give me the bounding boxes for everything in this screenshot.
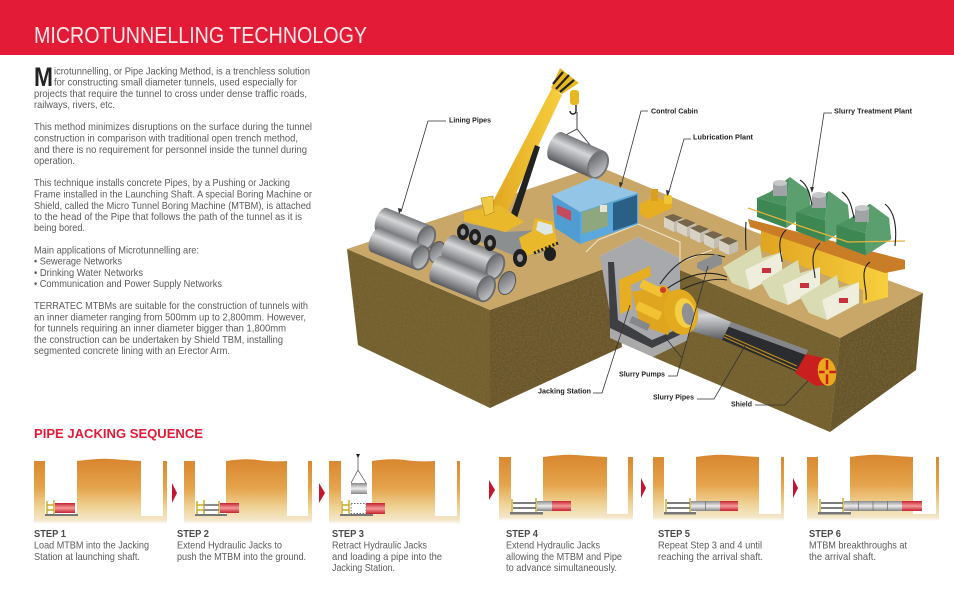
step 6 text: the arrival shaft. xyxy=(809,552,876,563)
step 2 text: Extend Hydraulic Jacks to xyxy=(177,540,282,552)
thrust ring xyxy=(660,286,702,338)
step 6 text: MTBM breakthroughs at xyxy=(809,540,907,552)
crane cab xyxy=(519,218,557,257)
intro text block: and there is no requirement for personnel inside the tunnel during xyxy=(34,145,307,156)
step 4 text: to advance simultaneously. xyxy=(506,563,617,574)
step 1 text: Load MTBM into the Jacking xyxy=(34,540,149,552)
orange platform beam xyxy=(748,219,905,273)
crane boom xyxy=(487,88,562,217)
intro text block: Shield, called the Micro Tunnel Boring Machine (MTBM), is attached xyxy=(34,201,311,212)
ground surface xyxy=(347,166,923,338)
intro text block: • Communication and Power Supply Networks xyxy=(34,279,222,290)
label: slurry pumps: Slurry Pumps xyxy=(619,370,665,378)
main illustration: microtunnelling site cutaway xyxy=(347,68,923,432)
intro text block: TERRATEC MTBMs are suitable for the construction of tunnels with xyxy=(34,301,308,312)
step 4 text: allowing the MTBM and Pipe xyxy=(506,552,622,563)
label: control cabin: Control Cabin xyxy=(651,106,698,116)
step 5 text: STEP 5 xyxy=(658,529,690,540)
label: slurry pipes: Slurry Pipes xyxy=(653,392,694,402)
slurry pump unit xyxy=(697,254,722,272)
arrow 4 xyxy=(641,478,646,498)
arrow 1 xyxy=(172,483,177,503)
label: lining pipes: Lining Pipes xyxy=(449,116,491,124)
step 2 text: STEP 2 xyxy=(177,529,209,540)
intro text block: for tunnels requiring an inner diameter bigger than 1,800mm xyxy=(34,324,286,334)
concrete pipe xyxy=(680,302,731,340)
label: slurry pipes xyxy=(653,346,745,402)
intro text block: This method minimizes disruptions on the surface during the tunnel xyxy=(34,122,312,133)
intro text block: operation. xyxy=(34,156,75,167)
intro text block: the construction can be undertaken by Shield TBM, installing xyxy=(34,335,283,346)
intro text block: construction in comparison with traditional open trench method, xyxy=(34,134,298,144)
step 5 diagram xyxy=(653,455,784,521)
header banner xyxy=(0,0,954,55)
intro text block xyxy=(34,62,313,357)
step 6 text: STEP 6 xyxy=(809,529,841,540)
step 4 text xyxy=(506,529,622,574)
shield xyxy=(795,354,838,387)
step 3 diagram xyxy=(329,454,460,524)
step 5 text: reaching the arrival shaft. xyxy=(658,552,763,563)
label: shield xyxy=(731,381,808,408)
step 4 text: STEP 4 xyxy=(506,529,538,540)
crane xyxy=(457,68,613,267)
arrow 3 xyxy=(489,480,495,500)
intro text block: segmented concrete lining with an Erector Arm. xyxy=(34,346,230,357)
green tanks xyxy=(757,177,891,255)
intro text block: • Sewerage Networks xyxy=(34,256,122,268)
intro text block: an inner diameter ranging from 500mm up to 2,800mm. However, xyxy=(34,312,306,324)
label: lubrication plant: Lubrication Plant xyxy=(693,132,754,142)
step 3 text: Jacking Station. xyxy=(332,563,395,574)
step 2 text: push the MTBM into the ground. xyxy=(177,552,306,563)
lifted pipe xyxy=(351,454,367,494)
intro text block: Frame installed in the Launching Shaft. A special Boring Machine or xyxy=(34,190,313,200)
lining pipes stack 1 xyxy=(366,206,448,273)
step 1 text: Station at launching shaft. xyxy=(34,552,140,563)
step 5 text xyxy=(658,529,763,563)
intro text block: for constructing small diameter tunnels, used especially for xyxy=(54,78,298,88)
intro text block: This technique installs concrete Pipes, by a Pushing or Jacking xyxy=(34,178,290,189)
slurry skips xyxy=(723,245,859,320)
step 5 text: Repeat Step 3 and 4 until xyxy=(658,540,762,552)
label: lining pipes xyxy=(398,116,491,214)
step 2 diagram xyxy=(184,459,312,524)
shaft interior and concrete base xyxy=(586,224,712,357)
label: jacking station: Jacking Station xyxy=(538,386,591,396)
step 6 diagram xyxy=(807,455,939,521)
step 1 text: STEP 1 xyxy=(34,529,66,540)
step 1 diagram xyxy=(34,459,167,524)
slurry treatment plant xyxy=(748,177,905,304)
intro text block: to the head of the Pipe that follows the path of the tunnel as it is xyxy=(34,212,302,223)
step 4 text: Extend Hydraulic Jacks xyxy=(506,540,600,552)
label: control cabin xyxy=(619,106,698,188)
label: jacking station xyxy=(538,305,630,396)
jacking station xyxy=(619,266,682,335)
arrow 5 xyxy=(793,478,798,498)
step 3 text: and loading a pipe into the xyxy=(332,552,442,563)
hanging pipe xyxy=(544,129,613,182)
tunnel dark section xyxy=(720,322,807,372)
step 3 text: Retract Hydraulic Jacks xyxy=(332,540,427,552)
ground block right faces xyxy=(640,270,923,432)
intro text block: • Drinking Water Networks xyxy=(34,268,143,279)
control cabin container xyxy=(552,178,638,244)
intro text block: being bored. xyxy=(34,223,85,234)
step 2 text xyxy=(177,529,306,563)
storage boxes xyxy=(664,214,738,255)
yellow support legs xyxy=(761,224,888,304)
crane wheels xyxy=(457,224,556,267)
ground block left faces xyxy=(347,249,622,408)
gray cylinders xyxy=(773,183,869,222)
step 3 text xyxy=(332,529,442,574)
intro text block: Main applications of Microtunnelling are: xyxy=(34,246,199,256)
lining pipes stack 2 xyxy=(426,233,519,305)
slurry hoses xyxy=(660,180,896,300)
step 6 text xyxy=(809,529,907,563)
section heading: pipe jacking sequence: PIPE JACKING SEQUENCE xyxy=(34,426,203,441)
step 3 text: STEP 3 xyxy=(332,529,364,540)
step 4 diagram xyxy=(499,455,633,521)
label: shield: Shield xyxy=(731,400,752,408)
lubrication plant xyxy=(640,189,738,255)
intro text block: railways, rivers, etc. xyxy=(34,100,115,111)
label: lubrication plant xyxy=(666,132,754,196)
label: slurry pumps xyxy=(619,266,708,378)
intro text block: icrotunnelling, or Pipe Jacking Method, is a trenchless solution xyxy=(54,66,310,78)
intro text block: projects that require the tunnel to cross under dense traffic roads, xyxy=(34,89,307,100)
arrow 2 xyxy=(319,483,325,503)
title: MICROTUNNELLING TECHNOLOGY xyxy=(34,22,367,48)
label: slurry treatment plant xyxy=(810,106,913,193)
crane truck chassis and deck xyxy=(462,222,552,258)
drop cap: M xyxy=(34,62,53,92)
crane hook and sling xyxy=(562,90,595,151)
label: slurry treatment plant: Slurry Treatment Plant xyxy=(834,106,913,116)
step 1 text xyxy=(34,529,149,563)
